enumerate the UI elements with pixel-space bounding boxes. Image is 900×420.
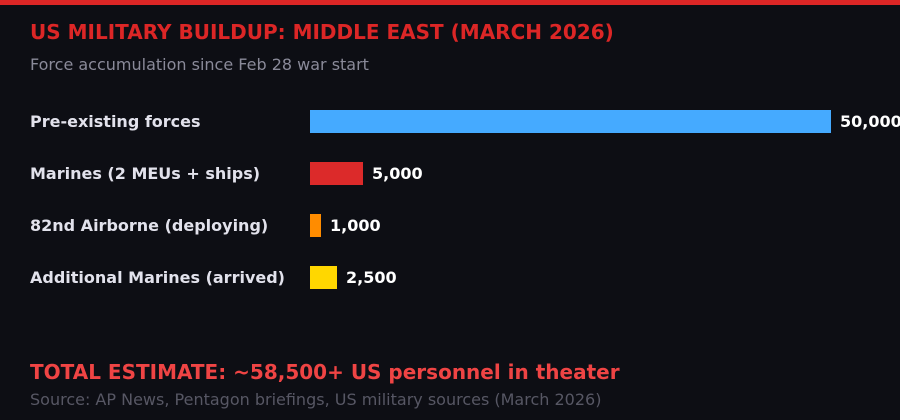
bar chart <box>30 110 900 289</box>
row: additional marines: Additional Marines (arrived) <box>30 268 285 287</box>
row: additional marines: 2,500 <box>346 268 397 287</box>
row: pre-existing forces: Pre-existing forces <box>30 112 201 131</box>
row: marines: Marines (2 MEUs + ships) <box>30 164 260 183</box>
row: additional marines <box>30 266 397 289</box>
total estimate: TOTAL ESTIMATE: ~58,500+ US personnel in theater <box>30 360 620 384</box>
title: US MILITARY BUILDUP: MIDDLE EAST (MARCH 2026) <box>30 20 614 44</box>
row: 82nd airborne <box>30 214 381 237</box>
row: pre-existing forces: 50,000 <box>840 112 900 131</box>
row: pre-existing forces <box>30 110 900 133</box>
row: 82nd airborne: 82nd Airborne (deploying) <box>30 216 268 235</box>
subtitle: Force accumulation since Feb 28 war start <box>30 55 369 74</box>
source: Source: AP News, Pentagon briefings, US military sources (March 2026) <box>30 390 601 409</box>
row: 82nd airborne: 1,000 <box>330 216 381 235</box>
row: marines: 5,000 <box>372 164 423 183</box>
row: marines <box>30 162 423 185</box>
